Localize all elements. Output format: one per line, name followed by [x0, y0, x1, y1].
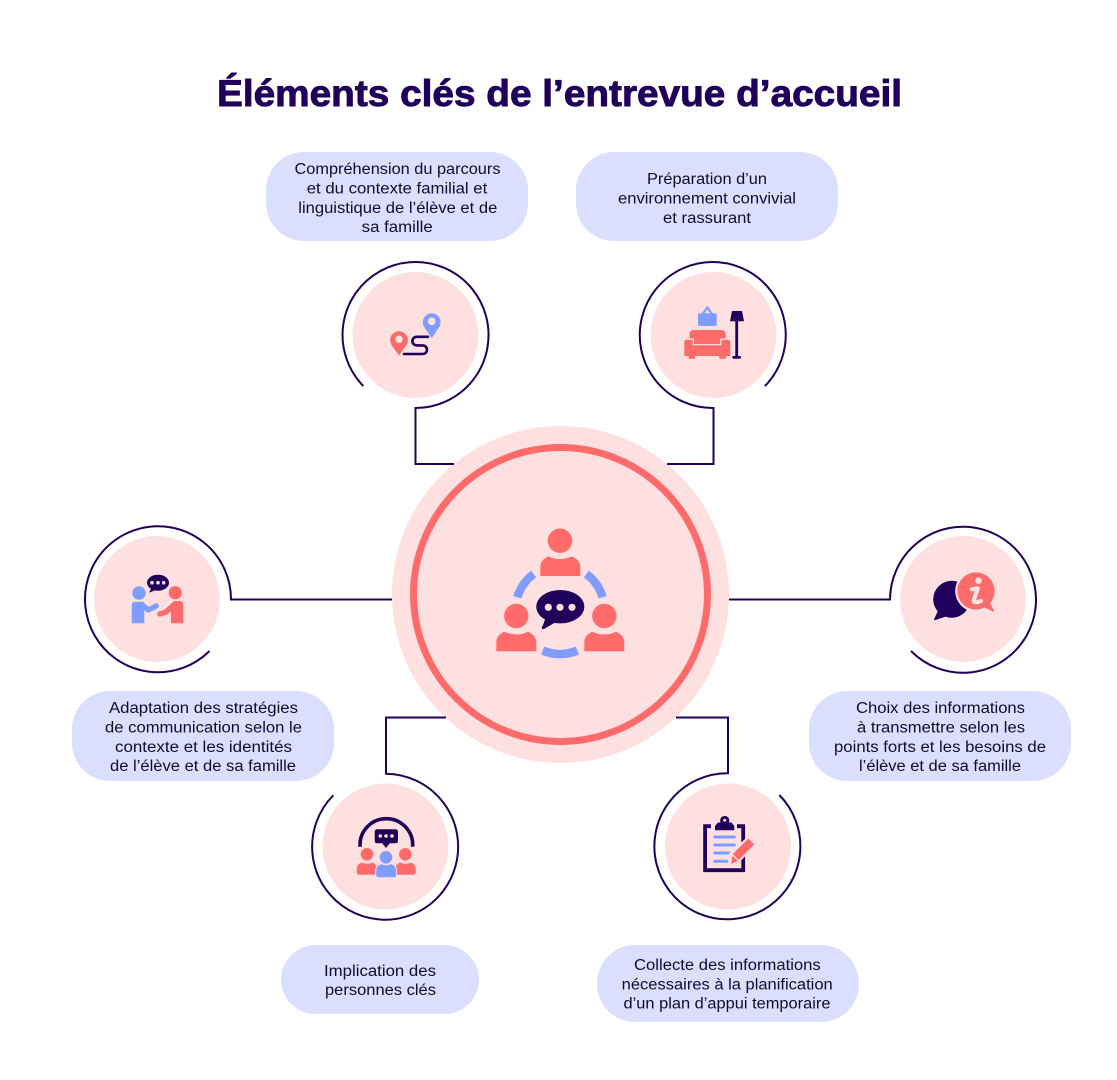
- panel: personnes clés: [281, 784, 479, 1014]
- label text: Collecte des informations: [634, 957, 821, 974]
- icon: two people talking: [132, 575, 183, 623]
- title: Éléments clés de l’entrevue d’accueil: [217, 73, 902, 114]
- label text: et du contexte familial et: [307, 180, 488, 198]
- icon disc: [665, 784, 791, 910]
- icon: sofa and lamp: [684, 308, 744, 359]
- label text: Adaptation des stratégies: [109, 700, 298, 717]
- label text: linguistique de l’élève et de: [298, 200, 497, 217]
- icon disc: [900, 536, 1026, 662]
- hub background disc: [392, 426, 729, 763]
- label text: l’élève et de sa famille: [859, 758, 1021, 775]
- label text: de communication selon le: [105, 720, 302, 736]
- label text: Choix des informations: [856, 700, 1025, 717]
- connector: middle right: [729, 527, 1036, 673]
- label pill: [72, 691, 334, 781]
- icon disc: [322, 784, 448, 910]
- panel: collecte des informations: [597, 784, 859, 1022]
- label pill: [576, 152, 838, 241]
- label text: [834, 700, 1046, 775]
- label pill: [597, 945, 859, 1022]
- label text: et rassurant: [663, 210, 752, 227]
- label pill: [809, 691, 1071, 781]
- connector: middle left: [85, 526, 392, 672]
- panel: stratégies de communication: [72, 536, 334, 781]
- icon disc: [352, 272, 478, 398]
- label text: [622, 957, 833, 1013]
- panel: central hub: [392, 426, 729, 763]
- icon disc: [650, 272, 776, 398]
- label text: de l’élève et de sa famille: [110, 758, 296, 775]
- panel: parcours: [266, 152, 528, 398]
- label text: à transmettre selon les: [857, 720, 1025, 736]
- label text: sa famille: [362, 219, 433, 236]
- label text: personnes clés: [325, 982, 436, 999]
- icon: clipboard and pencil: [705, 816, 757, 870]
- label text: [324, 963, 436, 999]
- label text: Implication des: [324, 963, 436, 980]
- icon: group conversation: [496, 528, 624, 654]
- label text: points forts et les besoins de: [834, 739, 1046, 756]
- panel: choix des informations: [809, 536, 1071, 781]
- label text: [294, 161, 501, 236]
- label text: environnement convivial: [618, 190, 796, 208]
- label text: [618, 171, 796, 227]
- connector: bottom right: [654, 718, 800, 919]
- label pill: [281, 945, 479, 1014]
- label text: nécessaires à la planification: [622, 976, 833, 993]
- connector: top left: [343, 262, 489, 464]
- label text: d’un plan d’appui temporaire: [624, 996, 830, 1013]
- label text: contexte et les identités: [115, 739, 292, 756]
- icon: information speech bubbles: [933, 571, 996, 620]
- label text: Préparation d’un: [647, 171, 767, 188]
- icon: route with map pins: [390, 313, 441, 356]
- label pill: [266, 152, 528, 241]
- connector: top right: [640, 262, 786, 464]
- panel: environnement: [576, 152, 838, 398]
- icon: key people meeting: [357, 819, 416, 878]
- label text: [105, 700, 302, 775]
- connector: bottom left: [312, 718, 458, 920]
- label text: Compréhension du parcours: [294, 161, 501, 178]
- icon disc: [94, 536, 220, 662]
- hub ring: [414, 448, 708, 742]
